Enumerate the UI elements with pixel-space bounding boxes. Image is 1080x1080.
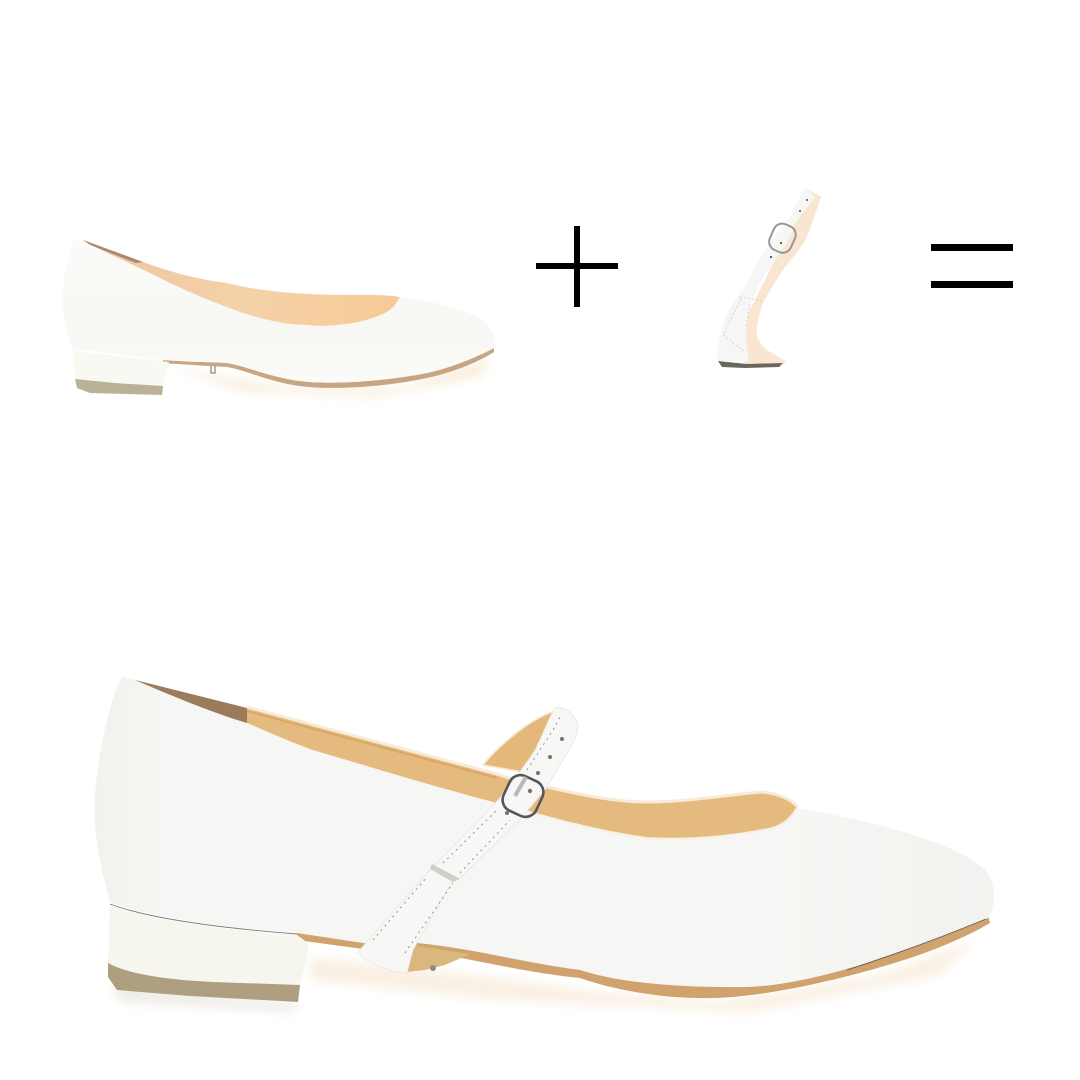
plus sign (536, 226, 618, 307)
buckle pin (515, 777, 526, 796)
strap holes (770, 199, 808, 258)
detachable strap (717, 188, 821, 368)
brown heel lining (135, 680, 247, 725)
shadow (170, 358, 490, 396)
lining shade band (247, 711, 497, 778)
heel tip (75, 379, 163, 395)
strap holes (505, 737, 564, 815)
buckle (766, 221, 799, 256)
strap underside with pin (407, 945, 470, 972)
small ballet flat (63, 240, 495, 396)
strap white body (717, 188, 815, 361)
metal pin (211, 366, 215, 373)
sole band (297, 915, 990, 998)
upper (95, 677, 994, 987)
large Mary Jane shoe (95, 677, 994, 1012)
lining (83, 240, 400, 330)
heel block (108, 905, 308, 985)
strap keeper (430, 864, 460, 882)
strap stitching (373, 717, 560, 953)
strap tan lining (745, 189, 821, 366)
shadow (310, 940, 975, 1012)
opening rim (497, 803, 797, 839)
brown heel lining (83, 240, 143, 263)
sole edge (163, 348, 494, 388)
strap sole (718, 361, 783, 368)
heel block (73, 351, 169, 386)
lining (135, 680, 797, 850)
strap (357, 707, 578, 973)
equals sign (931, 244, 1013, 288)
upper (63, 240, 495, 383)
lining rim (247, 707, 798, 807)
stitch seam (723, 297, 762, 352)
rear strap inner lining (483, 712, 554, 772)
buckle (499, 771, 547, 821)
toe welt line (847, 919, 986, 970)
heel tip (108, 963, 300, 1002)
heel seam (110, 904, 297, 934)
